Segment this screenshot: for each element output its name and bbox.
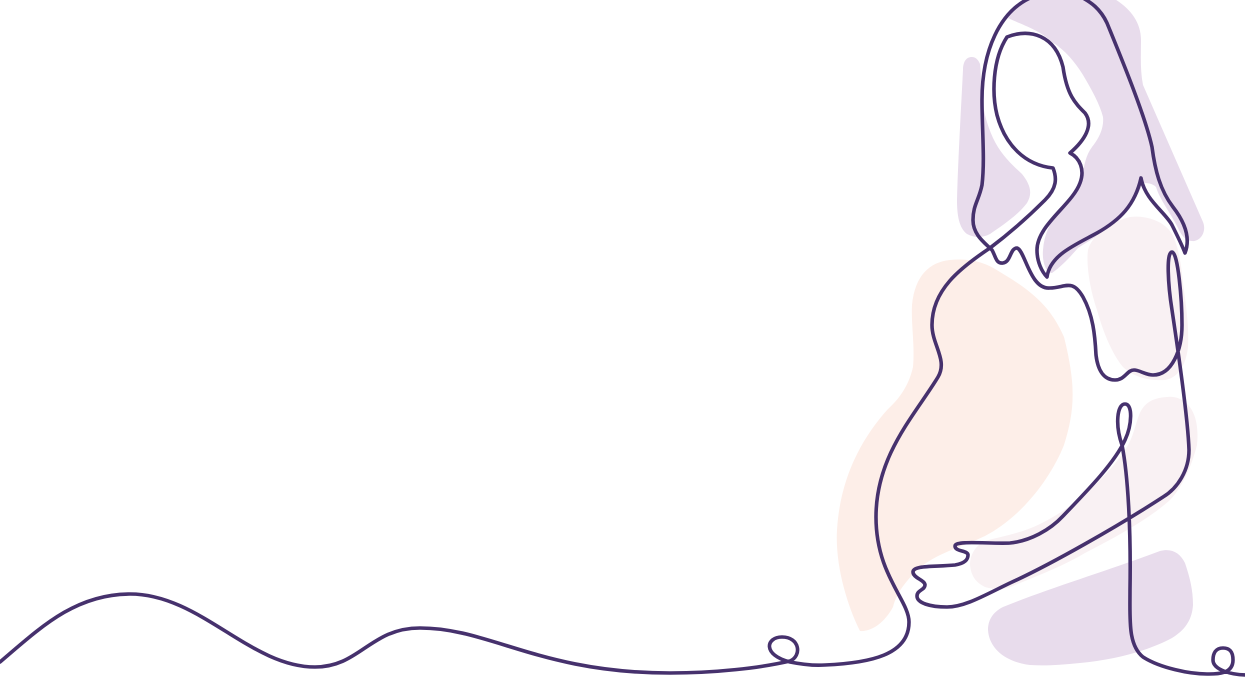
colour blob: hair, left purple — [957, 57, 1030, 237]
colour blob: hair, main purple — [1008, 0, 1204, 273]
colour blob: chest, pale pink — [1087, 217, 1188, 380]
colour blob: ground, purple — [988, 550, 1193, 665]
colour blob: belly, peach — [837, 260, 1073, 631]
colour blob: forearm, pale pink — [970, 397, 1198, 589]
